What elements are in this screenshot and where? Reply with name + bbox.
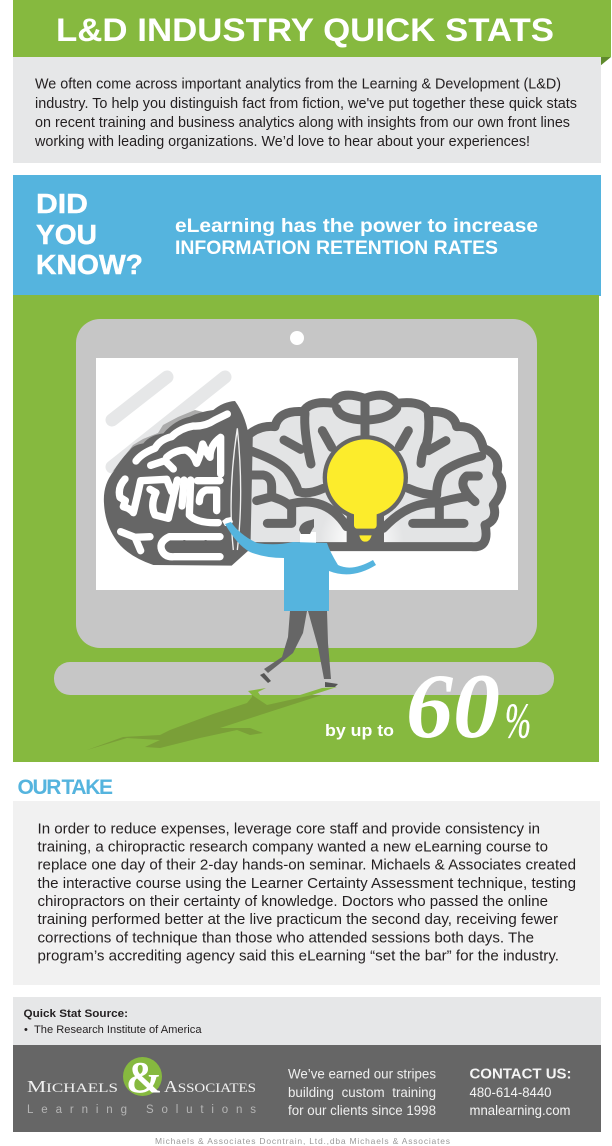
left brain lobe bbox=[104, 401, 250, 566]
icon: brain with light bulb bbox=[104, 395, 502, 566]
logo: Learning bbox=[27, 1104, 127, 1116]
tagline: building custom training bbox=[288, 1085, 436, 1100]
intro text: industry. To help you distinguish fact from fiction, we've put together these quick stats bbox=[35, 96, 577, 112]
statistic: by up to 60%: % bbox=[505, 692, 531, 748]
panel: introduction bbox=[13, 57, 601, 163]
torso and arms bbox=[225, 522, 376, 611]
our take text: replace one day of their 2-day hands-on seminar. Michaels & Associates created bbox=[38, 858, 576, 874]
panel: footer bbox=[13, 1045, 601, 1132]
legs bbox=[264, 611, 307, 673]
logo: M ICHAELS bbox=[27, 1077, 118, 1096]
source item: The Research Institute of America bbox=[34, 1024, 202, 1036]
intro text: We often come across important analytics from the Learning & Development (L&D) bbox=[35, 76, 561, 92]
icon: laptop bbox=[54, 319, 554, 695]
our take text: the interactive course using the Learner Certainty Assessment technique, testing bbox=[38, 876, 576, 892]
legal line: Michaels & Associates Docntrain, Ltd.,dba Michaels & Associates bbox=[155, 1136, 450, 1146]
heading: our take: OUR TAKE bbox=[18, 776, 113, 799]
logo: & bbox=[126, 1053, 162, 1102]
right brain lobe bbox=[246, 395, 502, 547]
title: L&D INDUSTRY QUICK STATS bbox=[56, 12, 554, 48]
did you know heading bbox=[36, 188, 143, 280]
logo: Solutions bbox=[146, 1104, 256, 1116]
contact details: mnalearning.com bbox=[470, 1103, 570, 1118]
contact details: CONTACT US: bbox=[470, 1066, 572, 1082]
our take text: In order to reduce expenses, leverage core staff and provide consistency in bbox=[38, 821, 540, 837]
did you know heading: KNOW? bbox=[36, 249, 143, 280]
tagline bbox=[288, 1066, 436, 1118]
our take text: training performed better at the live practicum the second day, receiving fewer bbox=[38, 912, 558, 928]
panel: quick stat source bbox=[13, 997, 601, 1045]
neck and hair bbox=[300, 532, 316, 543]
logo: ASSOCIATES bbox=[164, 1077, 256, 1096]
panel: green illustration area bbox=[13, 295, 599, 762]
did you know heading: DID bbox=[36, 188, 88, 219]
statement text: eLearning has the power to increase bbox=[175, 215, 538, 237]
statistic: by up to 60%: 60 bbox=[406, 655, 500, 757]
did you know heading: YOU bbox=[36, 219, 97, 250]
panel: did you know header bbox=[13, 175, 601, 296]
intro text: on recent training and business analytics along with insights from our own front lines bbox=[35, 115, 570, 131]
shadow of person bbox=[87, 687, 337, 750]
intro text bbox=[34, 76, 577, 150]
contact details bbox=[470, 1066, 572, 1118]
figure: person bbox=[222, 517, 376, 687]
source heading: Quick Stat Source: bbox=[24, 1008, 128, 1020]
intro text: working with leading organizations. We’d love to hear about your experiences! bbox=[34, 134, 530, 150]
tagline: We’ve earned our stripes bbox=[288, 1066, 436, 1082]
icon: diagonal screen glare bbox=[112, 377, 225, 467]
tagline: for our clients since 1998 bbox=[288, 1103, 436, 1118]
stripe shadow on brain edge bbox=[112, 410, 203, 472]
contact details: 480-614-8440 bbox=[470, 1085, 552, 1100]
statistic: by up to 60% bbox=[325, 655, 531, 757]
our take text bbox=[38, 821, 576, 964]
panel: our take body bbox=[13, 801, 600, 985]
our take text: corrections of technique than those who attended sessions both days. The bbox=[38, 930, 534, 946]
statement text bbox=[175, 215, 538, 259]
our take text: program’s accrediting agency said this eLearning “set the bar” for the industry. bbox=[38, 948, 559, 964]
statistic: by up to 60%: by up to bbox=[325, 721, 394, 740]
our take text: training, a chiropractic research company wanted a new eLearning course to bbox=[38, 840, 548, 856]
source bullet: • bbox=[24, 1024, 28, 1036]
statement text: INFORMATION RETENTION RATES bbox=[175, 237, 498, 259]
title banner bbox=[13, 0, 611, 66]
our take text: chiropractors on their certainty of knowledge. Doctors who passed the online bbox=[38, 894, 548, 910]
logo bbox=[27, 1053, 256, 1116]
hand bbox=[222, 517, 233, 526]
